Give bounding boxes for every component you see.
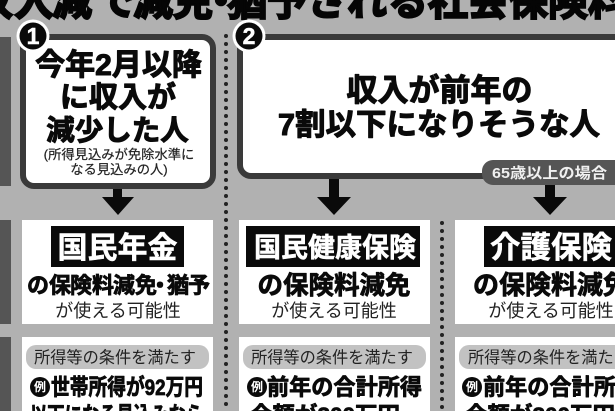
badge: number 1: 1 [27,23,40,49]
panel: national health insurance: が使える可能性 [271,301,397,321]
panel: national pension: の保険料減免・猶予 [27,273,210,298]
panel: condition 1: (所得見込みが免除水準に [44,146,194,162]
panel: pension income conditions [22,337,213,411]
badge: number 2: 2 [243,23,255,49]
panel: national health insurance [239,220,430,324]
arrow: to pension [102,189,134,215]
badge: number 1 [16,20,50,52]
panel: health insurance income conditions: 所得等の条件を満たす [251,349,413,367]
panel: condition 2: 収入が前年の [346,73,532,108]
panel: pension income conditions: 所得等の条件を満たす [34,349,196,367]
label: age 65 and over [482,160,615,185]
panel: national pension: が使える可能性 [55,301,181,321]
panel: national health insurance: 国民健康保険 [254,233,416,263]
label: age 65 and over: 65歳以上の場合 [492,165,607,182]
panel: pension income conditions: 例 [34,380,46,394]
panel: nursing care income conditions: 例 [466,380,478,394]
panel: health insurance income conditions: 例 [251,380,263,394]
panel: condition 1: 今年2月以降 [35,49,202,82]
arrow: to nursing care insurance [533,185,567,215]
arrow: to health insurance [317,179,351,215]
panel: nursing care income conditions [455,337,615,411]
panel: condition 1: に収入が [60,80,176,114]
panel: pension income conditions: 世帯所得が92万円 [51,374,203,400]
panel: health insurance income conditions: 前年の合計所得 [267,375,422,400]
panel: condition 2 [240,37,615,176]
panel: health insurance income conditions [239,337,430,411]
panel: condition 1 [23,37,213,186]
panel: condition 1: なる見込みの人) [70,162,168,177]
panel: national pension: 国民年金 [58,232,178,265]
panel: national health insurance: の保険料減免 [257,272,411,300]
panel: nursing care insurance: 介護保険 [490,231,612,265]
panel: condition 1: 減少した人 [46,115,189,147]
panel: nursing care insurance: が使える可能性 [488,301,614,321]
panel: national pension [22,220,213,324]
badge: number 2 [232,20,266,52]
panel: condition 2: 7割以下になりそうな人 [278,108,600,142]
left side bars [0,37,11,411]
panel: nursing care insurance [455,220,615,324]
